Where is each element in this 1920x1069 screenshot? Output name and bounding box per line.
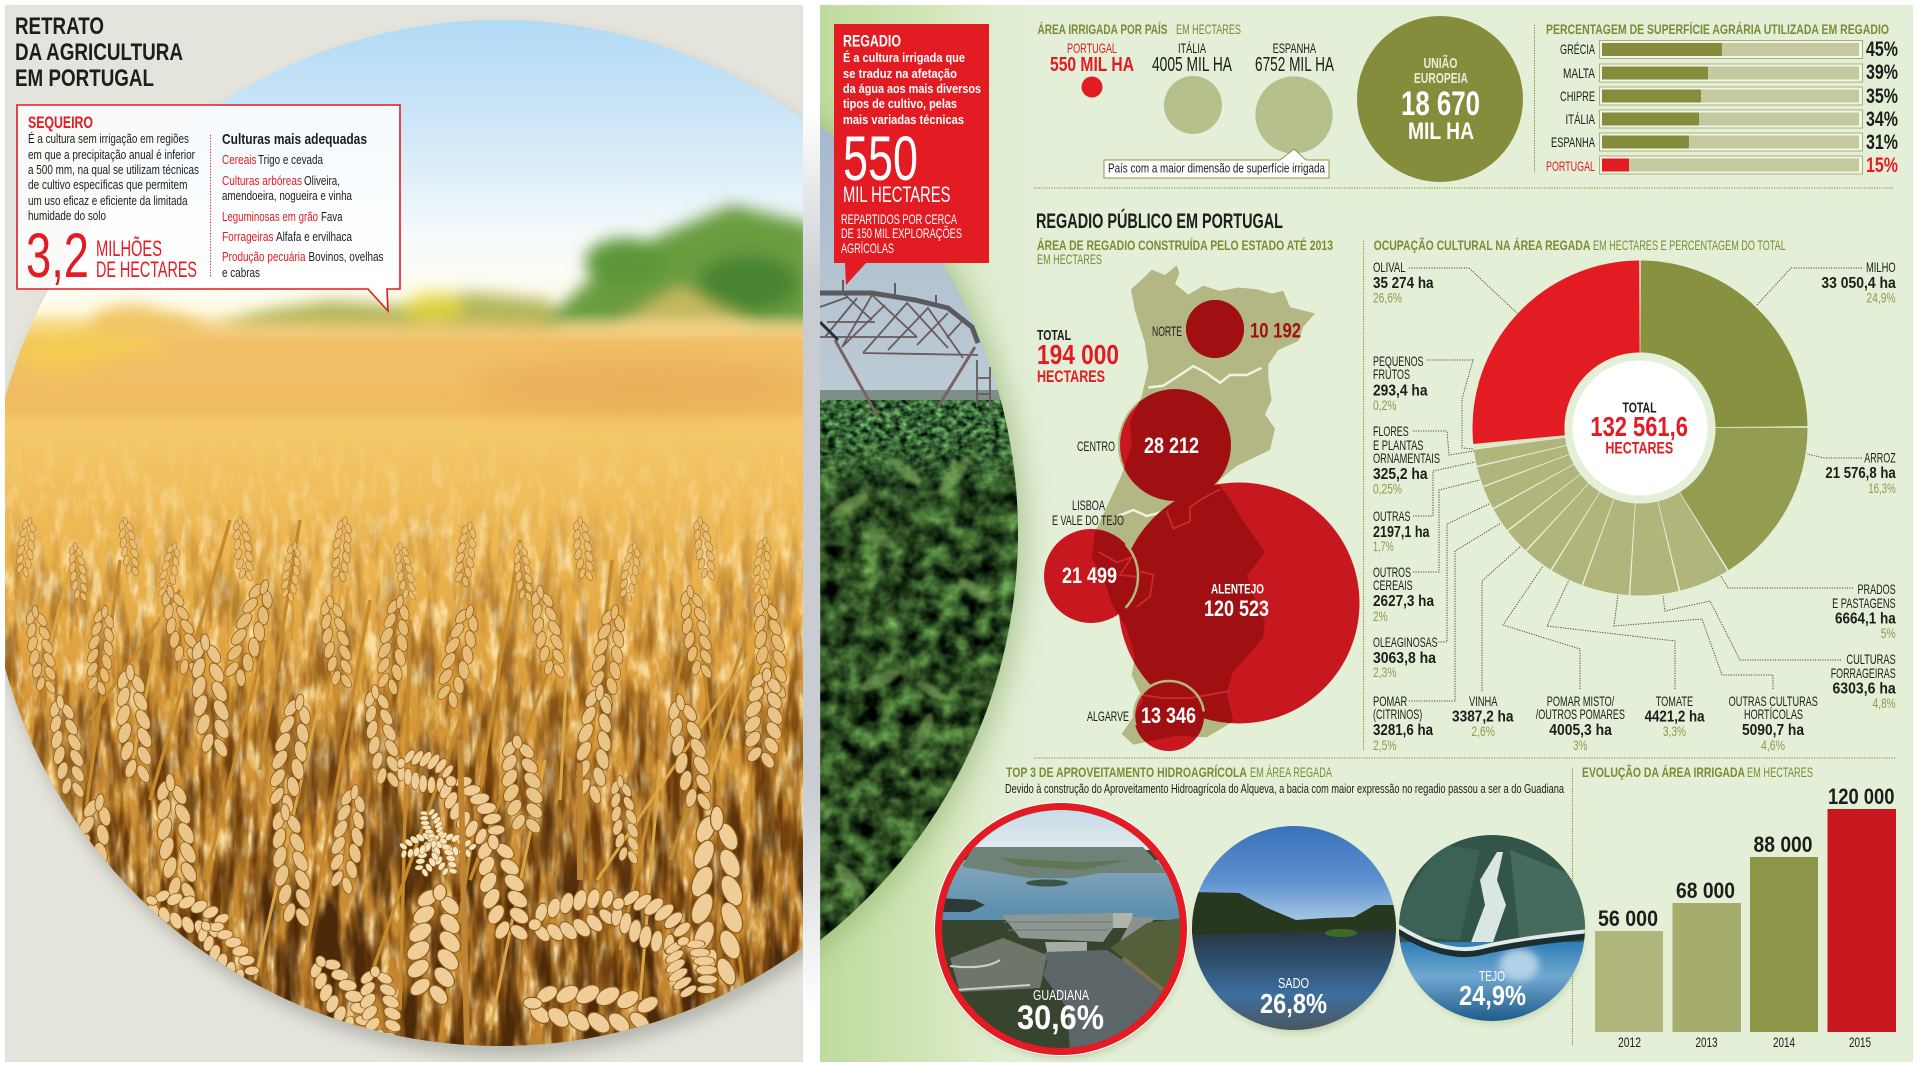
bar: 2014: 88 000	[1754, 832, 1812, 857]
text: sequeiro definition: humidade do solo	[28, 208, 106, 223]
region: lisboa e vale do tejo	[1052, 497, 1124, 588]
donut chart: ocupacao cultural	[1518, 306, 1762, 550]
label: tomate: 3,3%	[1663, 723, 1686, 739]
stat: 3,2 milhoes de hectares: DE HECTARES	[96, 257, 197, 282]
stat: 550 mil hectares: 550	[843, 124, 918, 194]
region: norte: 10 192	[1250, 320, 1301, 342]
stat: total 194 000 hectares: HECTARES	[1037, 367, 1105, 386]
region: centro: CENTRO	[1077, 438, 1115, 454]
bright leaves	[828, 453, 995, 901]
label: tomate: 4421,2 ha	[1645, 708, 1705, 726]
heading: top 3 aproveitamento hidroagricola: Devido à construção do Aproveitamento Hidroagrícola do Alqueva, a bacia com maior expressão no regadio passou a ser a do Guadiana	[1005, 781, 1565, 796]
subheading: ocupacao cultural	[1374, 236, 1786, 253]
shadow strip between panels	[803, 110, 820, 1010]
row: espanha: 31%	[1866, 131, 1898, 154]
label: flores e plantas ornamentais	[1373, 423, 1440, 496]
text: regadio definition: se traduz na afetação	[843, 66, 957, 81]
label: pomar citrinos	[1373, 693, 1433, 753]
text: regadio definition: mais variadas técnicas	[843, 112, 964, 127]
row: malta: MALTA	[1563, 65, 1595, 81]
label: milho: MILHO	[1866, 259, 1896, 275]
text: sequeiro definition: em que a precipitação anual é inferior	[28, 147, 196, 162]
label: pomar misto: 4005,3 ha	[1549, 722, 1612, 739]
photo circle: tejo	[1398, 835, 1590, 1023]
row: italia: 34%	[1866, 108, 1898, 131]
callout: maior superficie irrigada: País com a maior dimensão de superfície irrigada	[1108, 160, 1326, 176]
label: culturas forrageiras: CULTURAS	[1846, 651, 1896, 667]
row: portugal	[1546, 154, 1898, 177]
list: culturas mais adequadas: Alfafa e ervilhaca	[276, 229, 353, 244]
text: regadio definition	[843, 50, 981, 127]
list: culturas mais adequadas: Culturas mais adequadas	[222, 131, 367, 148]
label: outras: 1,7%	[1373, 538, 1394, 554]
circle: uniao europeia: UNIÃO	[1424, 54, 1458, 72]
text: regadio definition: É a cultura irrigada que	[843, 50, 965, 65]
bar: 2014	[1750, 832, 1818, 1050]
label: arroz: ARROZ	[1864, 449, 1896, 465]
leader lines	[1409, 268, 1862, 701]
title: DA AGRICULTURA	[15, 39, 183, 66]
circle: uniao europeia: 18 670	[1401, 85, 1480, 123]
row: italia	[1566, 108, 1898, 131]
label: oleaginosas: 2,3%	[1373, 664, 1396, 680]
donut center total	[1590, 399, 1688, 458]
panel: regadio red box: REPARTIDOS POR CERCA	[841, 211, 957, 227]
label: pomar citrinos: 2,5%	[1373, 737, 1396, 753]
bar: 2012: 2012	[1618, 1034, 1641, 1050]
circle: uniao europeia	[1357, 16, 1523, 182]
subheading: ocupacao cultural: EM HECTARES E PERCENTAGEM DO TOTAL	[1593, 237, 1786, 253]
label: flores e plantas ornamentais: 325,2 ha	[1373, 466, 1428, 483]
label: flores e plantas ornamentais: FLORES	[1373, 423, 1409, 439]
stat: total 194 000 hectares	[1037, 327, 1119, 386]
list: culturas mais adequadas: Leguminosas em grão	[222, 209, 318, 224]
row: malta	[1563, 61, 1898, 84]
label: flores e plantas ornamentais: E PLANTAS	[1373, 437, 1424, 453]
label: milho	[1821, 259, 1896, 306]
callout: maior superficie irrigada	[1104, 149, 1329, 178]
label: arroz: 21 576,8 ha	[1825, 465, 1896, 482]
photo circle: guadiana	[934, 802, 1188, 1058]
label: prados e pastagens	[1832, 581, 1896, 641]
text: sequeiro definition: É a cultura sem irrigação em regiões	[28, 131, 189, 146]
country: espanha	[1255, 40, 1334, 154]
stat: 550 mil hectares: MIL HECTARES	[843, 182, 950, 207]
row: portugal: PORTUGAL	[1546, 158, 1595, 174]
label: outros cereais: OUTROS	[1373, 564, 1411, 580]
photo circle: sado	[1192, 826, 1396, 1033]
photo: wheat field circle	[5, 20, 803, 1062]
panel: regadio red box	[834, 24, 989, 285]
label: vinha: 2,6%	[1471, 723, 1495, 739]
label: olival	[1373, 259, 1434, 306]
row: grecia	[1560, 38, 1898, 61]
label: pomar citrinos: 3281,6 ha	[1373, 722, 1433, 739]
stat: 3,2 milhoes de hectares: MILHÕES	[96, 236, 162, 261]
subheading: area de regadio construida: ÁREA DE REGADIO CONSTRUÍDA PELO ESTADO ATÉ 2013	[1037, 237, 1333, 253]
pivot structure	[820, 280, 990, 417]
title: RETRATO	[15, 13, 104, 40]
label: tomate: TOMATE	[1656, 693, 1693, 709]
stat: 3,2 milhoes de hectares	[26, 221, 197, 291]
label: vinha: 3387,2 ha	[1452, 708, 1514, 726]
chart: area irrigada por pais: EM HECTARES	[1176, 21, 1241, 37]
bar: 2012: 56 000	[1598, 906, 1658, 931]
region: norte	[1152, 320, 1301, 342]
label: tomate	[1645, 693, 1705, 739]
region: centro	[1077, 433, 1199, 458]
label: pomar citrinos: (CITRINOS)	[1373, 706, 1422, 722]
bar: 2015	[1828, 784, 1896, 1050]
country: espanha: ESPANHA	[1273, 40, 1317, 56]
label: tejo value: 24,9%	[1459, 980, 1526, 1011]
subheading: ocupacao cultural: OCUPAÇÃO CULTURAL NA ÁREA REGADA	[1374, 236, 1590, 253]
label: tejo value	[1459, 968, 1526, 1011]
label: pomar misto: /OUTROS POMARES	[1536, 706, 1625, 722]
label: sado value: SADO	[1278, 975, 1309, 992]
bar: 2013: 68 000	[1676, 878, 1735, 903]
panel: regadio red box: AGRÍCOLAS	[841, 240, 894, 256]
panel: regadio red box: DE 150 MIL EXPLORAÇÕES	[841, 225, 962, 241]
heading: regadio publico em portugal: REGADIO PÚBLICO EM PORTUGAL	[1036, 209, 1283, 233]
text: sequeiro definition: de cultivo específicas que permitem	[28, 177, 188, 192]
label: outras culturas horticolas: 4,6%	[1761, 737, 1785, 753]
stat: total 194 000 hectares: TOTAL	[1037, 327, 1071, 344]
country: portugal	[1050, 40, 1134, 98]
list: culturas mais adequadas: Trigo e cevada	[258, 152, 324, 167]
label: pomar misto: POMAR MISTO/	[1547, 693, 1614, 709]
bar: 2013: 2013	[1696, 1034, 1718, 1050]
bar: 2013	[1672, 878, 1741, 1050]
row: portugal: 15%	[1866, 154, 1898, 177]
subheading: area de regadio construida	[1037, 237, 1333, 267]
panel: regadio red box: REGADIO	[843, 33, 901, 51]
label: outras: 2197,1 ha	[1373, 524, 1430, 541]
photo: irrigation pivot over green crop	[820, 111, 1040, 961]
country: espanha: 6752 MIL HA	[1255, 54, 1334, 76]
donut center total: 132 561,6	[1590, 411, 1688, 442]
bar: 2015: 2015	[1849, 1034, 1871, 1050]
region: algarve: 13 346	[1141, 703, 1196, 728]
label: oleaginosas	[1373, 634, 1438, 680]
label: milho: 24,9%	[1866, 290, 1896, 306]
region: lisboa e vale do tejo: 21 499	[1062, 563, 1117, 588]
label: prados e pastagens: 6664,1 ha	[1835, 611, 1896, 628]
label: outras: OUTRAS	[1373, 508, 1410, 524]
wheat ears foreground	[139, 739, 747, 1049]
circle: uniao europeia: EUROPEIA	[1414, 70, 1468, 87]
panel: right background	[820, 5, 1913, 1062]
country: italia	[1152, 40, 1232, 134]
heading: top 3 aproveitamento hidroagricola	[1005, 764, 1565, 796]
list: culturas mais adequadas: Cereais	[222, 152, 257, 167]
label: olival: 26,6%	[1373, 290, 1402, 306]
country: italia: 4005 MIL HA	[1152, 54, 1232, 76]
list: culturas mais adequadas: Forrageiras	[222, 229, 274, 244]
label: milho: 33 050,4 ha	[1821, 275, 1896, 292]
chart: area irrigada por pais	[1038, 16, 1523, 182]
circle: uniao europeia: MIL HA	[1408, 118, 1474, 145]
row: espanha: ESPANHA	[1551, 134, 1595, 150]
label: oleaginosas: 3063,8 ha	[1373, 650, 1436, 667]
list: culturas mais adequadas: Produção pecuária	[222, 249, 306, 264]
label: outras culturas horticolas: 5090,7 ha	[1742, 722, 1804, 739]
bar chart: evolucao da area irrigada: EVOLUÇÃO DA ÁREA IRRIGADA	[1582, 763, 1745, 780]
label: guadiana value: 30,6%	[1017, 999, 1104, 1037]
label: outras culturas horticolas: OUTRAS CULTURAS	[1729, 693, 1818, 709]
country: italia: ITÁLIA	[1178, 40, 1206, 56]
stat: 3,2 milhoes de hectares: 3,2	[26, 221, 89, 291]
label: culturas forrageiras	[1831, 651, 1896, 711]
label: outros cereais: 2%	[1373, 608, 1388, 624]
row: malta: 39%	[1866, 61, 1898, 84]
heading: top 3 aproveitamento hidroagricola: TOP 3 DE APROVEITAMENTO HIDROAGRÍCOLA	[1006, 764, 1247, 780]
row: italia: ITÁLIA	[1566, 111, 1595, 127]
bar chart: evolucao da area irrigada	[1582, 763, 1896, 1050]
label: outras	[1373, 508, 1430, 554]
bar: 2015: 120 000	[1828, 784, 1894, 809]
label: outros cereais	[1373, 564, 1434, 624]
row: chipre	[1560, 85, 1898, 108]
heading: top 3 aproveitamento hidroagricola: EM ÁREA REGADA	[1250, 764, 1332, 780]
region: alentejo: 120 523	[1204, 596, 1269, 621]
donut center total: TOTAL	[1622, 399, 1656, 416]
region: lisboa e vale do tejo: LISBOA	[1072, 497, 1105, 513]
label: pomar citrinos: POMAR	[1373, 693, 1407, 709]
row: grecia: GRÉCIA	[1560, 41, 1595, 57]
label: pequenos frutos	[1373, 353, 1428, 413]
region: lisboa e vale do tejo: E VALE DO TEJO	[1052, 512, 1124, 528]
label: culturas forrageiras: 6303,6 ha	[1832, 680, 1896, 698]
label: prados e pastagens: 5%	[1881, 625, 1896, 641]
label: outros cereais: CEREAIS	[1373, 577, 1413, 593]
list: culturas mais adequadas: Bovinos, ovelhas	[308, 249, 384, 264]
bar: 2012	[1595, 906, 1663, 1050]
text: sequeiro definition: a 500 mm, na qual se utilizam técnicas	[28, 162, 199, 177]
region: algarve: ALGARVE	[1087, 708, 1129, 724]
text: sequeiro definition	[28, 131, 199, 223]
row: espanha	[1551, 131, 1898, 154]
region: alentejo	[1204, 580, 1269, 621]
row: chipre: 35%	[1866, 85, 1898, 108]
label: arroz	[1825, 449, 1896, 496]
wheat ears far row	[12, 515, 775, 603]
label: arroz: 16,3%	[1868, 480, 1896, 496]
row: chipre: CHIPRE	[1560, 88, 1595, 104]
label: sado value: 26,8%	[1260, 988, 1327, 1019]
list: culturas mais adequadas: Fava	[321, 209, 343, 224]
label: oleaginosas: OLEAGINOSAS	[1373, 634, 1438, 650]
list: culturas mais adequadas: e cabras	[222, 265, 260, 280]
list: culturas mais adequadas: Culturas arbóreas	[222, 173, 302, 188]
label: tejo value: TEJO	[1479, 968, 1505, 985]
label: sado value	[1260, 975, 1327, 1019]
bar chart: percentagem de superficie agraria	[1546, 21, 1898, 177]
label: flores e plantas ornamentais: ORNAMENTAIS	[1373, 450, 1440, 466]
callout: sequeiro: SEQUEIRO	[28, 114, 93, 132]
region: centro: 28 212	[1144, 433, 1199, 458]
donut center total: HECTARES	[1605, 439, 1673, 458]
label: pomar misto: 3%	[1573, 737, 1587, 753]
panel: left background	[5, 5, 803, 1062]
callout: sequeiro	[17, 105, 400, 311]
label: outras culturas horticolas	[1729, 693, 1818, 753]
label: pomar misto	[1536, 693, 1625, 753]
text: regadio definition: tipos de cultivo, pelas	[843, 96, 957, 111]
text: regadio definition: da água aos mais diversos	[843, 81, 981, 96]
bar chart: evolucao da area irrigada: EM HECTARES	[1747, 764, 1813, 780]
list: culturas mais adequadas	[222, 131, 384, 280]
label: prados e pastagens: PRADOS	[1858, 581, 1896, 597]
stat: total 194 000 hectares: 194 000	[1037, 339, 1119, 370]
row: grecia: 45%	[1866, 38, 1898, 61]
label: vinha	[1452, 693, 1514, 739]
region: norte: NORTE	[1152, 323, 1182, 339]
label: pequenos frutos: 0,2%	[1373, 397, 1396, 413]
title	[15, 13, 183, 92]
label: outros cereais: 2627,3 ha	[1373, 593, 1434, 610]
map: portugal regions bubbles	[1044, 265, 1360, 751]
list: culturas mais adequadas: amendoeira, nogueira e vinha	[222, 188, 353, 203]
subheading: area de regadio construida: EM HECTARES	[1037, 251, 1102, 267]
region: algarve	[1087, 703, 1196, 728]
region: alentejo: ALENTEJO	[1211, 580, 1264, 596]
label: pequenos frutos: FRUTOS	[1373, 366, 1410, 382]
label: outras culturas horticolas: HORTÍCOLAS	[1744, 706, 1803, 722]
label: flores e plantas ornamentais: 0,25%	[1373, 480, 1402, 496]
wheat ears middle rows	[20, 574, 792, 712]
label: vinha: VINHA	[1469, 693, 1498, 709]
country: portugal: PORTUGAL	[1067, 40, 1117, 56]
country: portugal: 550 MIL HA	[1050, 54, 1134, 76]
wheat stems	[60, 520, 750, 1050]
bar: 2014: 2014	[1773, 1034, 1795, 1050]
label: olival: OLIVAL	[1373, 259, 1406, 275]
chart: area irrigada por pais: ÁREA IRRIGADA POR PAÍS	[1038, 21, 1168, 37]
label: pequenos frutos: PEQUENOS	[1373, 353, 1424, 369]
label: guadiana value: GUADIANA	[1033, 987, 1089, 1004]
label: culturas forrageiras: 4,8%	[1872, 695, 1896, 711]
label: pequenos frutos: 293,4 ha	[1373, 382, 1428, 400]
list: culturas mais adequadas: Oliveira,	[304, 173, 340, 188]
text: sequeiro definition: um uso eficaz e eficiente da limitada	[28, 193, 188, 208]
title: EM PORTUGAL	[15, 65, 154, 92]
label: olival: 35 274 ha	[1373, 275, 1434, 292]
